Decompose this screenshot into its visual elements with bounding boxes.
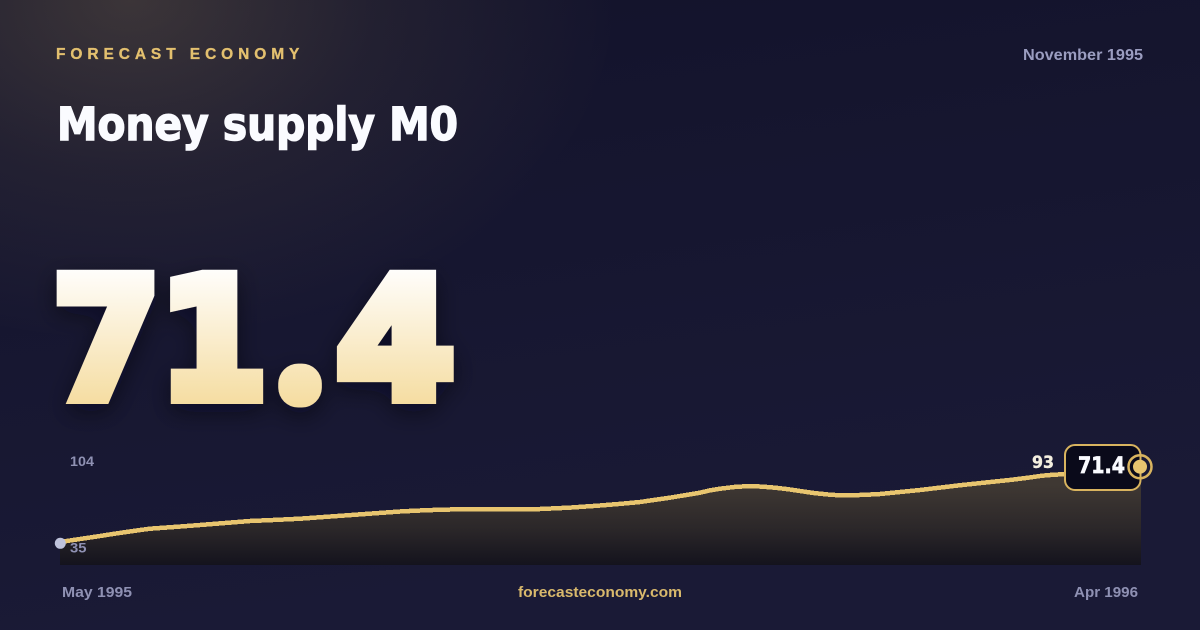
end date: Apr 1996: [1074, 584, 1138, 601]
website: forecasteconomy.com: [518, 584, 682, 601]
current value badge: 71.4: [1078, 454, 1125, 479]
date label: November 1995: [1023, 47, 1143, 64]
previous value label: 93: [1032, 453, 1054, 473]
current value badge: [1065, 445, 1140, 490]
big value: [54, 270, 458, 418]
start point marker: [55, 538, 66, 549]
start date: May 1995: [62, 584, 132, 601]
axis min label: 35: [70, 540, 87, 556]
trend line: [60, 474, 1070, 542]
area fill: [60, 474, 1141, 565]
chart: area and line: [60, 474, 1141, 565]
end point marker: [1128, 455, 1152, 478]
axis max label: 104: [70, 453, 94, 469]
brand label: FORECAST ECONOMY: [56, 46, 304, 63]
title: Money supply M0: [57, 98, 458, 151]
